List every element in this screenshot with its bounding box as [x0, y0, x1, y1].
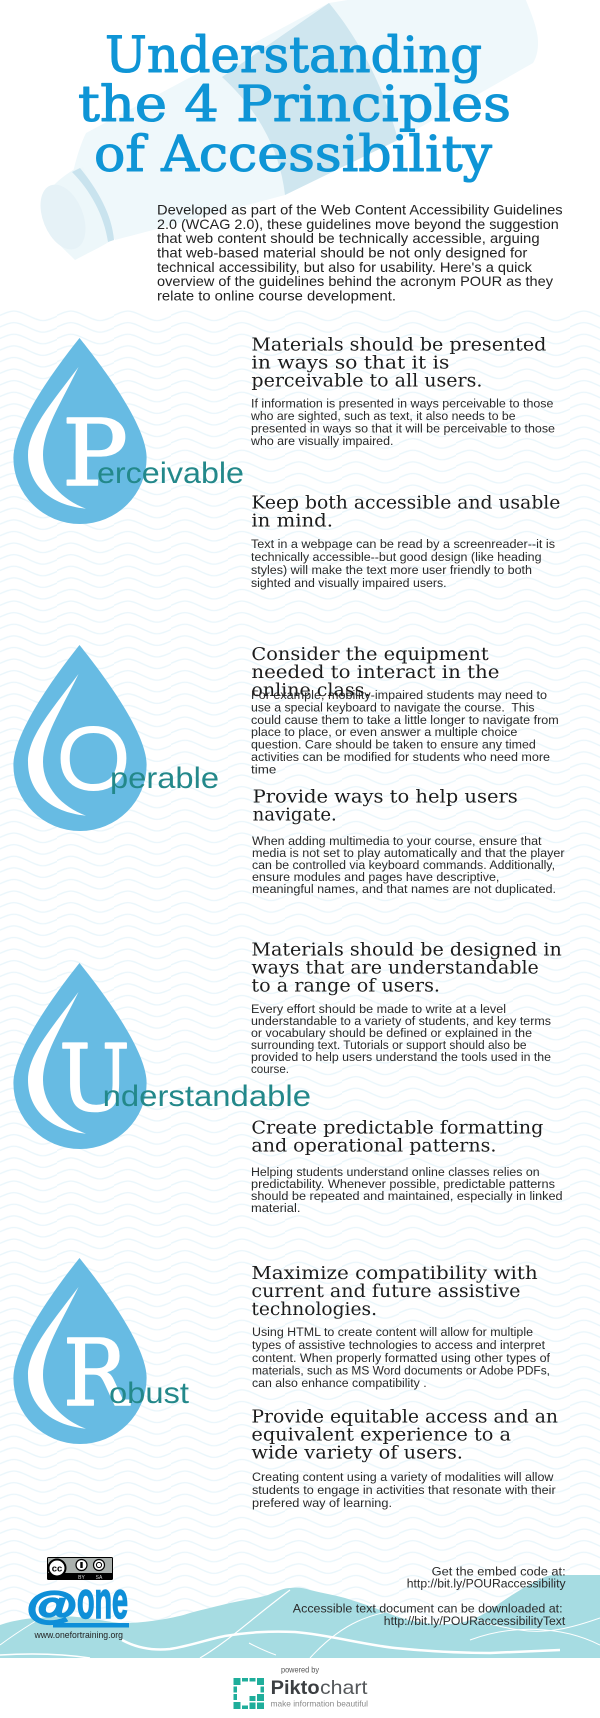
icon: creative commons badge [47, 1557, 113, 1581]
text: operable 2: When adding multimedia to your course, ensure that [252, 834, 542, 848]
text: perceivable 2: technically accessible--but good design (like heading [251, 550, 542, 564]
drop: understandable [13, 963, 311, 1149]
drop: robust [13, 1258, 190, 1444]
intro text: that web content should be technically accessible, arguing [157, 231, 540, 246]
text: robust 2: equivalent experience to a [251, 1426, 511, 1446]
text: understandable 2: Helping students understand online classes relies on [251, 1165, 540, 1179]
text: perceivable 2: Keep both accessible and usable [251, 494, 560, 514]
drop: robust: R [63, 1320, 131, 1427]
text: embed and download links: Get the embed code at: [432, 1564, 566, 1578]
text: operable 1: Consider the equipment [251, 645, 489, 665]
text: robust 1: materials, such as MS Word documents or Adobe PDFs, [252, 1364, 550, 1378]
drop: perceivable: erceivable [97, 457, 244, 490]
icon: creative commons badge: SA [96, 1575, 103, 1581]
text: operable 2: Provide ways to help users [253, 788, 518, 808]
drop: robust: obust [109, 1377, 190, 1410]
drop: operable: O [56, 708, 131, 810]
text: operable 1: online class. [251, 681, 370, 701]
text: understandable 1: surrounding text. Tutorials or support should also be [251, 1038, 527, 1052]
text: understandable 1 [251, 940, 562, 1076]
text: robust 1: Maximize compatibility with [251, 1264, 538, 1284]
intro text: Developed as part of the Web Content Accessibility Guidelines [157, 202, 563, 218]
intro text [157, 202, 563, 304]
text: operable 2: meaningful names, and that names are not duplicated. [252, 882, 556, 896]
text: operable 1: use a special keyboard to navigate the course. This [251, 700, 535, 714]
text: operable 1: place to place, or even answer a multiple choice [251, 725, 518, 739]
footer wave [0, 1575, 600, 1658]
text: robust 2 [251, 1408, 558, 1510]
logo: piktochart: make information beautiful [271, 1699, 368, 1709]
drop: perceivable [13, 338, 244, 524]
logo: piktochart [234, 1664, 368, 1709]
text: perceivable 1: If information is presented in ways perceivable to those [251, 396, 554, 410]
drop: operable: perable [110, 762, 219, 795]
text: perceivable 1 [250, 336, 555, 448]
text: robust 1: types of assistive technologies to access and interpret [252, 1338, 546, 1352]
text: understandable 2: should be repeated and maintained, especially in linked [251, 1189, 563, 1203]
text: understandable 2: and operational patterns. [251, 1136, 496, 1156]
text: robust 1: can also enhance compatibility . [252, 1376, 427, 1390]
text: operable 1: For example, mobility-impaired students may need to [251, 688, 547, 702]
text: understandable 1: ways that are understandable [251, 958, 539, 978]
logo: @one: one [77, 1572, 128, 1630]
logo: piktochart: chart [320, 1677, 368, 1699]
title: the 4 Principles [78, 75, 511, 133]
text: operable 1: could cause them to take a little longer to navigate from [251, 713, 559, 727]
text: understandable 2 [251, 1118, 563, 1215]
drop: understandable: U [59, 1025, 130, 1132]
text: robust 2: Provide equitable access and an [251, 1408, 558, 1428]
title: Understanding [105, 26, 482, 84]
text: robust 2: prefered way of learning. [252, 1496, 392, 1510]
drop: understandable: nderstandable [103, 1080, 311, 1113]
text: understandable 1: Every effort should be made to write at a level [251, 1002, 506, 1016]
text: robust 1: Using HTML to create content will allow for multiple [252, 1325, 533, 1339]
text: perceivable 2: styles) will make the text more user friendly to both [251, 563, 532, 577]
text: perceivable 1: Materials should be presented [251, 336, 546, 356]
intro text: that web-based material should be not only designed for [157, 246, 528, 260]
text: perceivable 1: in ways so that it is [251, 354, 449, 374]
text: operable 2 [252, 788, 564, 896]
drop: perceivable: P [62, 400, 128, 507]
text: embed and download links [293, 1564, 566, 1628]
icon: creative commons badge: BY [78, 1575, 85, 1581]
text: robust 2: Creating content using a variety of modalities will allow [252, 1470, 553, 1484]
text: perceivable 1: perceivable to all users. [251, 372, 482, 392]
text: perceivable 2: Text in a webpage can be read by a screenreader--it is [251, 537, 555, 551]
text: understandable 1: provided to help users understand the tools used in the [251, 1050, 551, 1064]
text: operable 1 [251, 645, 559, 776]
text: perceivable 1: presented in ways so that it will be perceivable to those [251, 421, 555, 435]
text: embed and download links: http://bit.ly/POURaccessibility [407, 1576, 566, 1590]
text: perceivable 2: in mind. [251, 512, 333, 532]
text: robust 1: current and future assistive [251, 1282, 520, 1302]
title: of Accessibility [94, 125, 493, 183]
logo: @one: @ [27, 1585, 77, 1626]
text: understandable 2: predictability. Whenever possible, predictable patterns [251, 1177, 555, 1191]
text: understandable 1: understandable to a variety of students, and key terms [251, 1014, 551, 1028]
text: understandable 2: Create predictable formatting [251, 1118, 543, 1138]
text: perceivable 2 [251, 494, 560, 590]
title [78, 26, 511, 183]
text: robust 1: content. When properly formatted using other types of [252, 1351, 551, 1365]
intro text: overview of the guidelines behind the acronym POUR as they [157, 274, 553, 289]
text: understandable 2: material. [251, 1201, 300, 1215]
text: operable 2: can be controlled via keyboard commands. Additionally, [252, 858, 555, 872]
text: operable 2: navigate. [253, 806, 337, 826]
intro text: relate to online course development. [157, 288, 396, 304]
text: robust 1 [251, 1264, 551, 1390]
text: operable 1: time [251, 762, 276, 776]
text: operable 2: media is not set to play automatically and that the player [252, 846, 564, 860]
logo: @one [27, 1572, 129, 1641]
text: understandable 1: course. [251, 1062, 289, 1076]
text: robust 2: students to engage in activities that resonate with their [252, 1483, 556, 1497]
text: perceivable 2: sighted and visually impaired users. [251, 576, 447, 590]
text: understandable 1: Materials should be designed in [251, 940, 562, 960]
text: operable 1: activities can be modified for students who need more [251, 750, 550, 764]
text: operable 1: needed to interact in the [251, 663, 499, 683]
text: operable 2: ensure modules and pages have descriptive, [252, 870, 499, 884]
text: embed and download links: Accessible text document can be downloaded at: [293, 1602, 563, 1616]
logo: @one: www.onefortraining.org [34, 1630, 123, 1641]
text: embed and download links: http://bit.ly/POURaccessibilityText [384, 1614, 566, 1628]
logo: piktochart: powered by [281, 1664, 320, 1674]
text: understandable 1: to a range of users. [251, 976, 440, 996]
text: robust 1: technologies. [251, 1300, 377, 1320]
intro text: 2.0 (WCAG 2.0), these guidelines move beyond the suggestion [157, 217, 559, 232]
text: robust 2: wide variety of users. [251, 1444, 463, 1464]
drop: operable [13, 645, 219, 831]
text: understandable 1: or vocabulary should be defined or explained in the [251, 1026, 532, 1040]
icon: creative commons badge: cc [52, 1564, 62, 1574]
bottle illustration [32, 0, 538, 260]
intro text: technical accessibility, but also for usability. Here's a quick [157, 260, 532, 275]
text: operable 1: question. Care should be taken to ensure any timed [251, 738, 536, 752]
logo: piktochart: Pikto [271, 1677, 320, 1699]
text: perceivable 1: who are sighted, such as text, it also needs to be [250, 409, 516, 423]
text: perceivable 1: who are visually impaired. [250, 434, 393, 448]
